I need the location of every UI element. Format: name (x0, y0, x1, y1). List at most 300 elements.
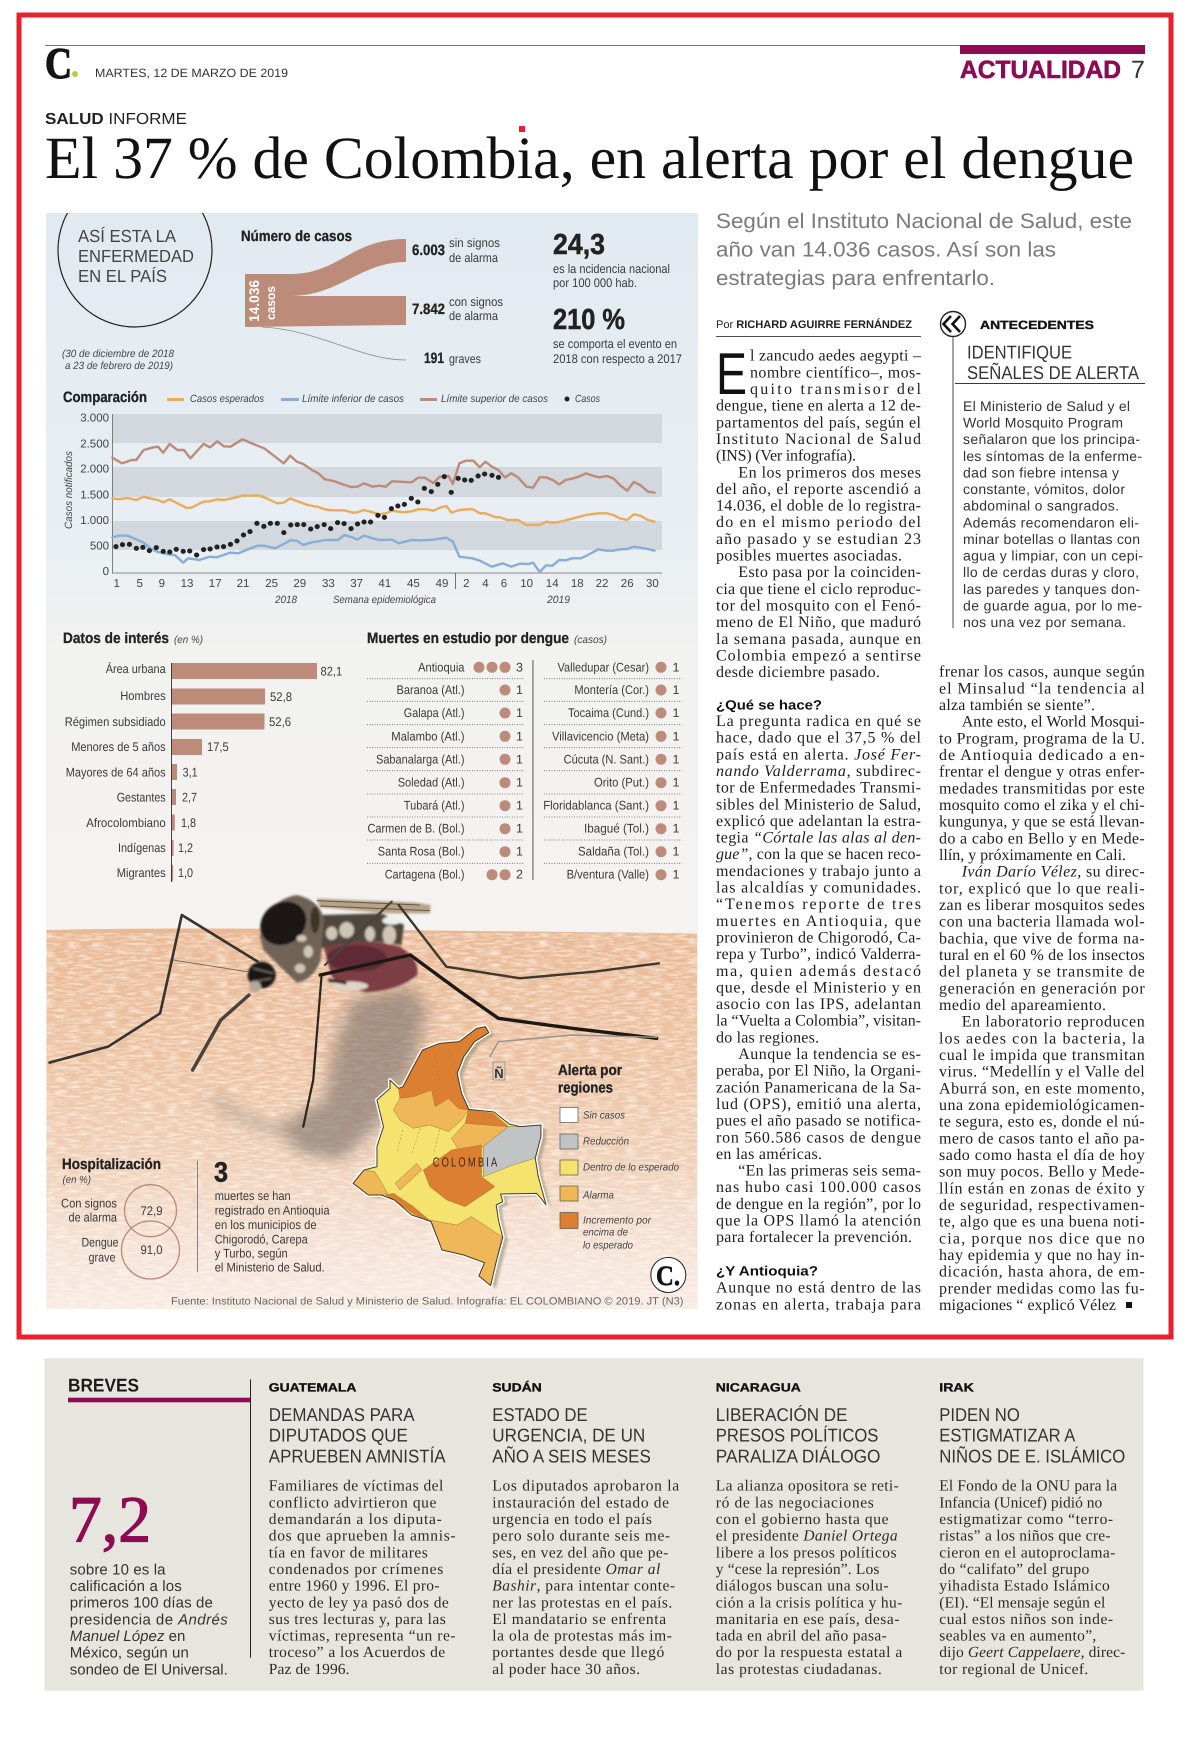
intro paragraphs: la semana pasada, aunque en (716, 631, 921, 648)
right column: Floridablanca (Sant.) (543, 799, 649, 813)
right column: 1 (672, 706, 680, 720)
brief: sudán: día el presidente Omar al (492, 1561, 660, 1578)
intro paragraphs: del año, el reporte ascendió a (716, 481, 921, 498)
brief: irak: (EI). “El mensaje según el (939, 1594, 1105, 1611)
title: El 37 % de Colombia, en alerta por el dengue (45, 125, 1134, 191)
brief: sudán: URGENCIA, DE UN (492, 1425, 645, 1446)
sidebar text: minar botellas o llantas con (963, 531, 1140, 547)
article column 2: prender medidas como las fu- (939, 1280, 1145, 1297)
brief: nicaragua (716, 1381, 902, 1678)
sankey: número de casos: 191 (424, 350, 444, 367)
sidebar heading: IDENTIFIQUE (967, 342, 1072, 363)
article column 2 (939, 664, 1145, 1314)
brief: nicaragua: PRESOS POLÍTICOS (716, 1425, 878, 1446)
left column: 1 (516, 729, 523, 743)
sankey: número de casos: de alarma (449, 309, 498, 323)
left column: Santa Rosa (Bol.) (378, 845, 464, 859)
right column: Tocaima (Cund.) (568, 706, 649, 720)
section text: explicó que adelantan la estra- (716, 813, 921, 830)
x axis labels: 29 (293, 578, 306, 590)
article column 2: el Minsalud “la tendencia al (939, 680, 1145, 697)
section text: do las regiones. (716, 1029, 819, 1046)
brief: guatemala: condenados por crímenes (269, 1561, 443, 1578)
x axis labels (113, 578, 659, 606)
bar chart: datos de interés: Migrantes (117, 866, 166, 880)
table: muertes en estudio por dengue: Muertes en estudio por dengue (367, 630, 569, 647)
x axis labels: 2019 (546, 594, 570, 606)
bar chart: datos de interés: Hombres (120, 689, 166, 703)
right column: 1 (672, 729, 680, 743)
y axis: 2.500 (80, 438, 109, 450)
brief: nicaragua: el presidente Daniel Ortega (716, 1528, 898, 1545)
article column 2: do a cabo en Bello y en Mede- (939, 830, 1145, 847)
brief: guatemala (269, 1381, 456, 1678)
x axis labels: Semana epidemiológica (333, 594, 436, 606)
article column 2: migaciones “ explicó Vélez (939, 1297, 1116, 1314)
article column 2: mero de casos tanto el año pa- (939, 1130, 1145, 1147)
left column: Galapa (Atl.) (404, 706, 464, 720)
section text: que, desde el Ministerio y en (716, 979, 921, 996)
right column: Villavicencio (Meta) (552, 729, 649, 743)
skin (46, 928, 697, 1309)
map legend: encima de (583, 1227, 628, 1239)
left column: 1 (516, 822, 523, 836)
brief: guatemala: dos que aprueben la amnis- (269, 1528, 456, 1545)
section text: “Tenemos reporte de tres (716, 896, 921, 913)
brief: sudán: SUDÁN (492, 1381, 542, 1395)
north marker: Ñ (494, 1066, 504, 1081)
kicker: SALUD INFORME (45, 111, 187, 128)
right column: Valledupar (Cesar) (558, 660, 649, 674)
stat: 3 muertes: registrado en Antioquia (215, 1203, 330, 1217)
right column: B/ventura (Valle) (567, 868, 649, 882)
left column: Soledad (Atl.) (398, 776, 464, 790)
right column: Ibagué (Tol.) (584, 822, 649, 836)
subhead: qué se hace: ¿Qué se hace? (716, 697, 822, 712)
mosquito legs (50, 902, 659, 1127)
brief: guatemala: tía en favor de militares (269, 1544, 428, 1561)
brief: irak: yihadista Estado Islámico (939, 1578, 1110, 1595)
left column: Sabanalarga (Atl.) (376, 752, 464, 766)
section text: tor de Enfermedades Transmi- (716, 780, 921, 797)
left column: 1 (516, 776, 523, 790)
y axis (63, 413, 662, 589)
brief: irak: seables va en aumento”, (939, 1628, 1096, 1645)
right column: 1 (672, 683, 680, 697)
article column 2: Iván Darío Vélez, su direc- (961, 864, 1145, 881)
hospitalización: 72,9 (140, 1204, 163, 1218)
bar chart: datos de interés: (en %) (174, 634, 203, 646)
bar chart: datos de interés (63, 630, 342, 882)
intro paragraphs: cia que tiene el ciclo reproduc- (716, 581, 921, 598)
hospitalización: 91,0 (140, 1243, 163, 1257)
x axis labels: 37 (350, 578, 363, 590)
section text: provinieron de Chigorodó, Ca- (716, 930, 921, 946)
left column: Antioquia (418, 660, 465, 674)
section text: en las américas. (716, 1146, 822, 1163)
brief: guatemala: víctimas, representa “un re- (269, 1628, 456, 1645)
brief: guatemala: sus tres lecturas y, para las (269, 1611, 446, 1628)
stat: 3 muertes: el Ministerio de Salud. (215, 1261, 325, 1275)
bar chart: datos de interés: Indígenas (118, 841, 166, 855)
article column 2: tor, explicó que lo que reali- (939, 880, 1145, 897)
left column: 2 (516, 868, 523, 882)
right column: 1 (672, 776, 680, 790)
table: muertes en estudio por dengue (367, 630, 682, 882)
bar chart: datos de interés: Área urbana (106, 662, 166, 676)
table: muertes en estudio por dengue: (casos) (574, 634, 607, 646)
left column: Malambo (Atl.) (391, 729, 464, 743)
article column 2: una zona epidemiológicamen- (939, 1097, 1145, 1114)
date: MARTES, 12 DE MARZO DE 2019 (95, 66, 288, 80)
section text: nas hubo casi 100.000 casos (716, 1179, 921, 1196)
brief: irak: cual estos niños son inde- (939, 1611, 1113, 1628)
stat: 7,2: sobre 10 es la (70, 1561, 166, 1578)
logo badge (651, 1258, 686, 1292)
article column 2: con una bacteria llamada wol- (939, 914, 1145, 931)
bar chart: datos de interés: 52,6 (269, 715, 291, 729)
brief: irak: PIDEN NO (939, 1404, 1020, 1425)
standfirst: Según el Instituto Nacional de Salud, este (716, 210, 1132, 233)
bar chart: datos de interés: 2,7 (182, 790, 197, 804)
article column 2: cual le impida que transmitan (939, 1047, 1145, 1064)
article column 2: hay epidemia y que no hay in- (939, 1247, 1145, 1264)
section text (716, 713, 922, 1246)
brief: sudán: ses, en vez del año que pe- (492, 1544, 668, 1561)
brief: guatemala: GUATEMALA (269, 1381, 357, 1395)
right column: Saldaña (Tol.) (578, 845, 649, 859)
x axis labels: 26 (621, 578, 634, 590)
right column (543, 660, 680, 882)
hospitalización: grave (88, 1251, 116, 1265)
article column 2: medio del apareamiento. (939, 997, 1106, 1014)
brief: sudán: portantes desde que llegó (492, 1644, 665, 1661)
brief: nicaragua: ró de las negociaciones (716, 1494, 874, 1511)
y axis: 500 (90, 540, 109, 552)
article column 2: sado como hasta el día de hoy (939, 1147, 1145, 1164)
y axis: 1.000 (80, 515, 109, 527)
sankey: número de casos: casos (264, 286, 278, 320)
sidebar heading: SEÑALES DE ALERTA (967, 362, 1140, 383)
stat: 7,2: 7,2 (69, 1484, 151, 1557)
y axis: 3.000 (80, 413, 109, 425)
logo badge: C. (656, 1261, 680, 1292)
stat: 3 muertes: y Turbo, según (215, 1247, 288, 1261)
brief: guatemala: yecto de ley ya pasó dos de (269, 1594, 449, 1611)
date range note (62, 348, 174, 372)
section text: hace, dado que el 37,5 % del (716, 730, 922, 747)
sankey: número de casos: 7.842 (412, 301, 445, 318)
section tag: ACTUALIDAD (960, 56, 1121, 84)
map label: COLOMBIA (433, 1155, 499, 1170)
right column: 1 (672, 660, 680, 674)
sankey: número de casos: 6.003 (412, 242, 445, 259)
hospitalización: Hospitalización (62, 1156, 161, 1173)
sidebar text: señalaron que los principa- (963, 431, 1140, 447)
stat: 7,2: México, según un (70, 1645, 189, 1662)
article column 2: cia, porque nos dice que no (939, 1230, 1145, 1247)
drop cap: E (716, 341, 747, 407)
breves heading (68, 1375, 251, 1402)
article column 2: mosquito como el zika y el chi- (939, 797, 1145, 814)
x axis labels: 25 (265, 578, 278, 590)
stat: 210 %: se comporta el evento en (553, 337, 677, 351)
stat: 3 muertes: muertes se han (215, 1189, 291, 1203)
section text: La pregunta radica en qué se (716, 713, 921, 730)
x axis labels: 22 (596, 578, 608, 590)
brief: guatemala: APRUEBEN AMNISTÍA (269, 1445, 446, 1466)
intro paragraphs: quito transmisor del (750, 381, 922, 398)
stat: 24,3: 24,3 (553, 229, 605, 261)
article column 2: llín, y próximamente en Cali. (939, 847, 1126, 864)
left column: 1 (516, 752, 523, 766)
section text: mendaciones y trabajo junto a (716, 863, 921, 880)
right column: 1 (672, 799, 680, 813)
brief: sudán: al poder hace 30 años. (492, 1661, 640, 1678)
stat: 24,3: es la ncidencia nacional (553, 262, 670, 276)
bar chart: datos de interés: Afrocolombiano (86, 816, 166, 830)
brief: nicaragua: con el gobierno hasta que (716, 1511, 889, 1528)
sidebar text: Además recomendaron eli- (963, 514, 1139, 530)
brief: nicaragua: tada en abril del año pasa- (716, 1628, 887, 1645)
bar chart: datos de interés: Régimen subsidiado (65, 715, 166, 729)
brief: sudán: Bashir, para intentar conte- (492, 1578, 675, 1595)
intro paragraphs: l zancudo aedes aegypti – (750, 348, 922, 365)
bar chart: datos de interés: 1,2 (178, 841, 193, 855)
intro paragraphs: 14.036, el doble de lo registra- (716, 498, 921, 515)
brief: sudán: El mandatario se enfrenta (492, 1611, 666, 1628)
left column: 1 (516, 683, 523, 697)
standfirst: año van 14.036 casos. Así son las (716, 238, 1056, 262)
map legend: lo esperado (583, 1239, 633, 1251)
article column 2: zan es liberar mosquitos sedes (939, 897, 1145, 914)
stat: 3 muertes: Chigorodó, Carepa (215, 1232, 308, 1246)
section text: las alcaldías y comunidades. (716, 880, 921, 896)
section text: peraba, por El Niño, la Organi- (716, 1063, 921, 1080)
section tag: 7 (1131, 56, 1145, 84)
intro paragraphs: do en el mismo periodo del (716, 514, 922, 531)
sidebar text: les síntomas de la enferme- (963, 448, 1142, 464)
article column 2: Ante esto, el World Mosqui- (962, 714, 1145, 731)
bar chart: datos de interés: 82,1 (320, 664, 342, 678)
intro paragraphs: dengue, tiene en alerta a 12 de- (716, 398, 921, 415)
right column: 1 (672, 822, 680, 836)
section text: repa y Turbo”, indicó Valderra- (716, 946, 921, 963)
x axis labels: 2 (463, 578, 470, 590)
brief: sudán: AÑO A SEIS MESES (492, 1445, 651, 1466)
brief: irak: ristas” a los niños que cre- (939, 1528, 1111, 1545)
sidebar text: abdominal o sangrados. (963, 498, 1119, 514)
map legend: Alerta por (558, 1062, 622, 1079)
intro paragraphs: nombre científico–, mos- (750, 364, 921, 381)
section text: de dengue en la región”, por lo (716, 1196, 921, 1213)
panel: infographic (46, 173, 698, 1309)
brief: irak: cieron en el autoproclama- (939, 1544, 1115, 1561)
intro paragraphs: En los primeros dos meses (738, 464, 921, 481)
intro paragraphs: Instituto Nacional de Salud (716, 431, 921, 448)
x axis labels: 30 (646, 578, 659, 590)
x axis labels: 1 (113, 578, 120, 590)
x axis labels: 17 (209, 578, 222, 590)
stat: 7,2: primeros 100 días de (70, 1595, 213, 1612)
intro paragraphs: Esto pasa por la coinciden- (738, 564, 921, 581)
sidebar text: nos una vez por semana. (963, 614, 1126, 630)
map legend: regiones (558, 1080, 613, 1097)
stat: 3 muertes: en los municipios de (215, 1218, 317, 1232)
brief: guatemala: demandarán a los diputa- (269, 1511, 442, 1528)
x axis labels: 4 (482, 578, 489, 590)
closing lines: zonas en alerta, trabaja para (716, 1296, 921, 1314)
intro paragraphs: partamentos del país, según el (716, 414, 922, 431)
left column: 1 (516, 845, 523, 859)
hospitalización: Dengue (82, 1236, 119, 1250)
section text: muertes en Antioquia, que (716, 913, 921, 930)
sidebar heading (955, 342, 1145, 384)
brief: sudán: urgencia en todo el país (492, 1511, 652, 1528)
intro paragraphs: año pasado y se estudian 23 (716, 531, 921, 548)
brief: irak: NIÑOS DE E. ISLÁMICO (939, 1445, 1125, 1466)
bar chart: datos de interés: Menores de 5 años (71, 740, 166, 754)
sankey: número de casos (241, 228, 503, 367)
article column 2: Aburrá son, en este momento, (939, 1080, 1145, 1097)
brief: nicaragua: ción a la crisis política y hu- (716, 1594, 902, 1611)
bar chart: datos de interés: 17,5 (207, 740, 229, 754)
sidebar text: constante, vómitos, dolor (963, 481, 1125, 497)
right column: Cúcuta (N. Sant.) (564, 752, 649, 766)
brief: nicaragua: PARALIZA DIÁLOGO (716, 1445, 880, 1466)
article column 2: kungunya, y que se está llevan- (939, 814, 1145, 831)
left column: Tubará (Atl.) (404, 799, 464, 813)
brief: nicaragua: diálogos buscan una solu- (716, 1578, 888, 1595)
heading (45, 111, 1134, 191)
brief: sudán (492, 1381, 679, 1678)
y axis: 2.000 (80, 464, 109, 476)
section text: gue”, con la que se hacen reco- (716, 846, 921, 863)
bar chart: datos de interés: 1,8 (181, 816, 196, 830)
bar chart: datos de interés: Datos de interés (63, 630, 169, 647)
section text: país está en alerta. José Fer- (716, 746, 921, 763)
left column: 1 (516, 706, 523, 720)
stat: 7,2: Manuel López en (70, 1628, 185, 1645)
article column 2: medades transmitidas por este (939, 780, 1145, 797)
sidebar text: El Ministerio de Salud y el (963, 398, 1130, 414)
stat: 210 %: 2018 con respecto a 2017 (553, 352, 682, 366)
sidebar: antecedentes (940, 312, 1145, 630)
article column 2: llín están en zonas de éxito y (939, 1180, 1145, 1197)
legend: Límite inferior de casos (302, 393, 405, 405)
right column: 1 (672, 868, 680, 882)
intro paragraphs (716, 348, 922, 681)
section text: asocio con las IPS, adelantan (716, 996, 921, 1013)
section tag (960, 45, 1145, 84)
brief: nicaragua: las protestas ciudadanas. (716, 1661, 882, 1678)
article column 1 (716, 341, 922, 1314)
stat: 7,2 (69, 1484, 228, 1678)
article column 2: los aedes con la bacteria, la (939, 1030, 1145, 1047)
circle title (57, 213, 213, 328)
brief: nicaragua: LIBERACIÓN DE (716, 1404, 848, 1425)
stat: 7,2: sondeo de El Universal. (70, 1661, 228, 1678)
map legend: Incremento por (583, 1214, 651, 1226)
article column 2: to Program, programa de la U. (939, 730, 1145, 747)
standfirst: estrategias para enfrentarlo. (716, 267, 995, 290)
sankey: número de casos: 14.036 (246, 280, 262, 322)
left column: Baranoa (Atl.) (396, 683, 464, 697)
legend: Casos esperados (190, 393, 265, 405)
brief: guatemala: troceso” a los Acuerdos de (269, 1644, 445, 1661)
brief: sudán: ESTADO DE (492, 1404, 588, 1425)
hospitalización (61, 1156, 180, 1279)
brief: irak: estigmatizar como “terro- (939, 1511, 1113, 1528)
brief: irak: Infancia (Unicef) pidió no (939, 1494, 1103, 1511)
stat: 210 %: 210 % (553, 304, 625, 336)
stat: 7,2: calificación a los (70, 1578, 182, 1595)
circle title: ENFERMEDAD (78, 246, 194, 266)
x axis labels: 33 (322, 578, 335, 590)
article column 2: alza también se siente”. (939, 697, 1095, 714)
intro paragraphs: Colombia empezó a sentirse (716, 647, 921, 664)
left column: 3 (516, 660, 523, 674)
brief: sudán: Los diputados aprobaron la (492, 1478, 679, 1495)
sidebar text: de guarde agua, por lo me- (963, 597, 1142, 613)
right column: Montería (Cor.) (574, 683, 649, 697)
sankey: número de casos: de alarma (449, 251, 498, 265)
hospitalización: de alarma (68, 1211, 117, 1225)
stat: 210 % (553, 304, 682, 366)
north marker (493, 1062, 505, 1081)
article column 2: virus. “Medellín y el Valle del (939, 1064, 1145, 1081)
sidebar text: World Mosquito Program (963, 415, 1123, 431)
bar chart: datos de interés: Mayores de 64 años (66, 766, 166, 780)
date range note: a 23 de febrero de 2019) (65, 360, 173, 372)
sidebar text (963, 398, 1143, 630)
article column 2: tural en el 60 % de los insectos (939, 947, 1145, 964)
map legend (558, 1062, 679, 1251)
section text: tegia “Córtale las alas al den- (716, 830, 921, 847)
brief: guatemala: Paz de 1996. (269, 1661, 350, 1678)
series (112, 439, 655, 572)
section text: Aunque la tendencia se es- (738, 1046, 921, 1063)
x axis labels: 6 (501, 578, 507, 590)
breves heading: BREVES (68, 1375, 139, 1396)
brief: irak (939, 1381, 1125, 1678)
circle title: ASÍ ESTA LA (78, 226, 176, 246)
article column 2: frenar los casos, aunque según (939, 664, 1145, 681)
article column 2: te, algo que es una buena noti- (939, 1214, 1145, 1231)
x axis labels: 2018 (274, 594, 297, 606)
x axis labels: 13 (181, 578, 193, 590)
map legend: Reducción (583, 1135, 629, 1147)
article column 2: de seguridad, respectivamen- (939, 1197, 1145, 1214)
intro paragraphs: posibles muertes asociadas. (716, 548, 902, 564)
y axis: Casos notificados (63, 450, 75, 529)
closing lines (716, 1279, 921, 1314)
chart title: Comparación (63, 389, 147, 406)
brief: guatemala: DIPUTADOS QUE (269, 1425, 408, 1446)
bands (112, 414, 662, 550)
y axis: 1.500 (80, 489, 109, 501)
closing lines: Aunque no está dentro de las (716, 1279, 921, 1296)
section text: la “Vuelta a Colombia”, visitan- (716, 1013, 921, 1030)
section text: que la OPS llamó la atención (716, 1212, 921, 1230)
stat: 24,3 (553, 229, 670, 290)
brief: sudán: pero solo durante seis me- (492, 1528, 670, 1545)
legend: Casos (575, 393, 601, 405)
section text: lud (OPS), emitió una alerta, (716, 1096, 921, 1113)
brief: irak: El Fondo de la ONU para la (939, 1478, 1117, 1495)
sidebar text: llo de cerdas duras y cloro, (963, 564, 1139, 580)
brief: guatemala: Familiares de víctimas del (269, 1478, 443, 1495)
